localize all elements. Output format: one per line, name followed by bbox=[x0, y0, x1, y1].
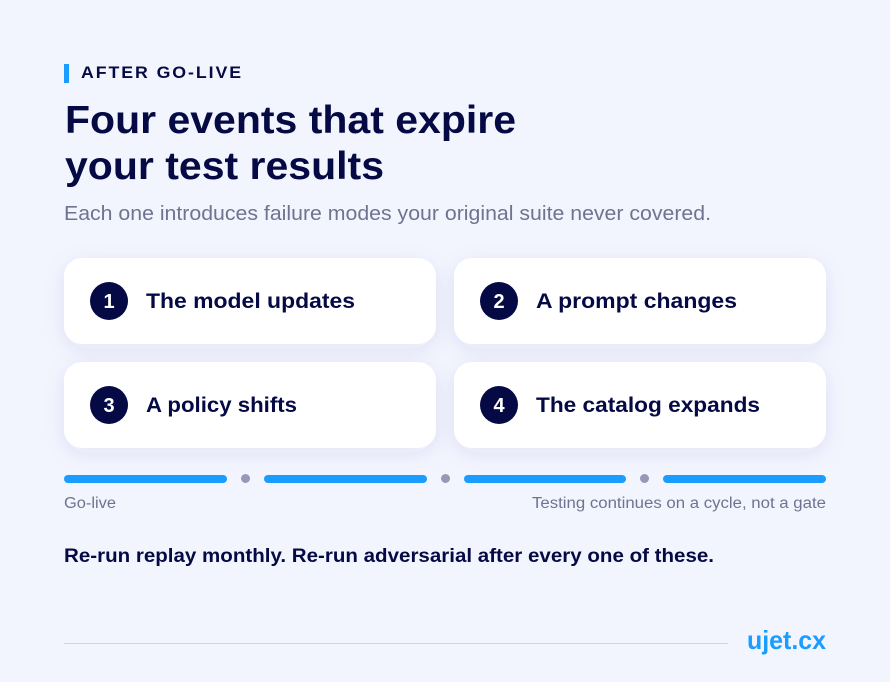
timeline label: end: Testing continues on a cycle, not a gate bbox=[532, 495, 826, 512]
timeline label: start: Go-live bbox=[64, 495, 116, 512]
panel: card 3 bbox=[64, 362, 436, 448]
panel: card 1: The model updates bbox=[146, 289, 355, 313]
title: your test results bbox=[65, 145, 384, 188]
logo: ujet.cx bbox=[747, 625, 827, 655]
eyebrow label: AFTER GO-LIVE bbox=[81, 64, 243, 82]
panel: card 1: 1 bbox=[103, 291, 115, 313]
panel: card 4 bbox=[454, 362, 826, 448]
panel: card 3: A policy shifts bbox=[146, 393, 297, 417]
panel: card 4: 4 bbox=[493, 395, 505, 417]
takeaway text: Re-run replay monthly. Re-run adversarial after every one of these. bbox=[64, 545, 714, 567]
panel: card 1 bbox=[64, 258, 436, 344]
panel: card 2 bbox=[454, 258, 826, 344]
title: Four events that expire bbox=[65, 99, 516, 142]
footer rule bbox=[64, 643, 728, 644]
subtitle: Each one introduces failure modes your original suite never covered. bbox=[64, 203, 711, 225]
panel: card 2: A prompt changes bbox=[536, 289, 737, 313]
panel: card 4: The catalog expands bbox=[536, 393, 760, 417]
timeline bbox=[64, 474, 826, 483]
panel: card 3: 3 bbox=[103, 395, 115, 417]
title bbox=[65, 99, 516, 188]
panel: card 2: 2 bbox=[493, 291, 505, 313]
